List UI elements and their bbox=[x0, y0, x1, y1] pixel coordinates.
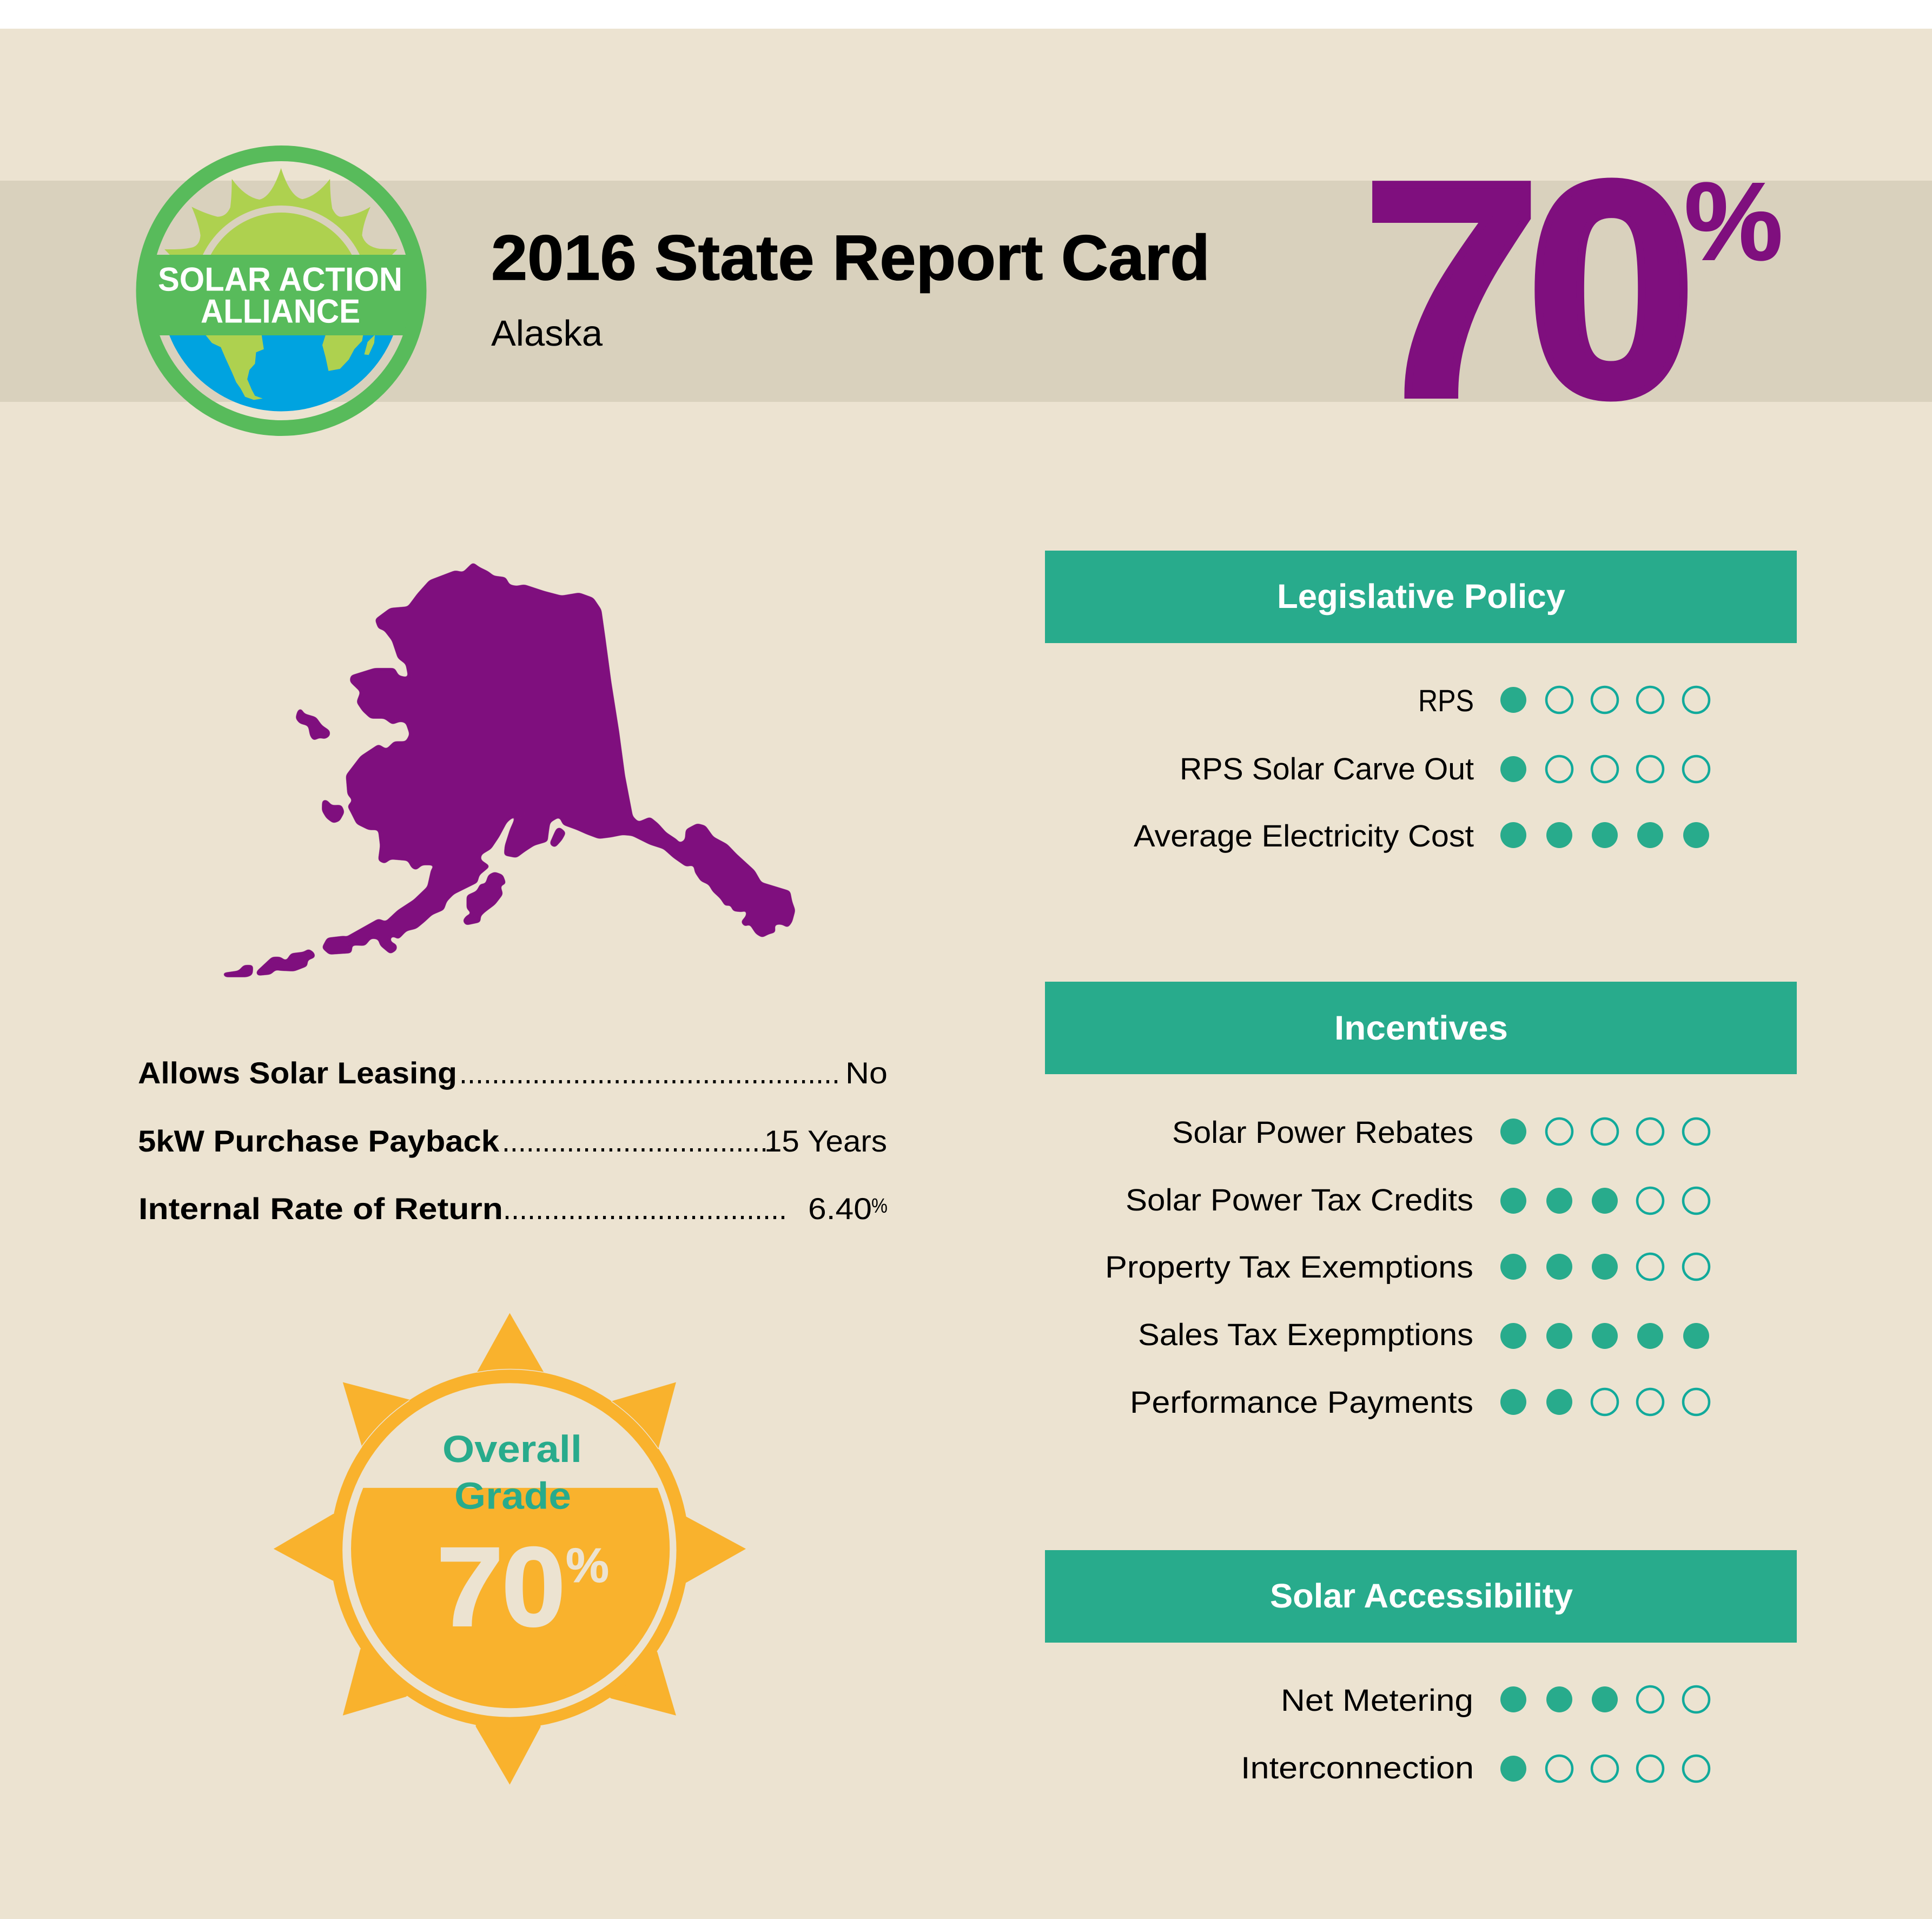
fact: payback: .................................. bbox=[502, 1124, 776, 1158]
logo globe bbox=[169, 335, 393, 411]
fact: solar leasing: ............................................... bbox=[459, 1056, 840, 1090]
fact: payback: 5kW Purchase Payback bbox=[138, 1124, 500, 1158]
fact: internal rate of return: % bbox=[871, 1195, 888, 1217]
row: performance payments bbox=[1130, 1385, 1709, 1420]
grade value: 7 bbox=[436, 1524, 504, 1650]
row: performance payments: Performance Payments bbox=[1130, 1385, 1473, 1420]
logo text: ALLIANCE bbox=[201, 293, 360, 330]
title: 2016 State Report Card bbox=[491, 222, 1210, 294]
row: solar power rebates: Solar Power Rebates bbox=[1172, 1115, 1473, 1150]
row: average electricity cost: Average Electricity Cost bbox=[1134, 819, 1474, 853]
section header: Legislative Policy bbox=[1277, 578, 1565, 616]
logo banner bbox=[143, 255, 419, 335]
row: net metering: Net Metering bbox=[1281, 1683, 1473, 1718]
panel: legislative policy bbox=[1045, 551, 1797, 853]
grade label: Grade bbox=[454, 1474, 571, 1517]
row: sales tax exemptions bbox=[1138, 1318, 1709, 1352]
grade label bbox=[442, 1428, 582, 1517]
sun rays and disc bbox=[274, 1313, 746, 1785]
grade value bbox=[436, 1524, 609, 1650]
fact: internal rate of return bbox=[138, 1192, 888, 1226]
big score: 70%: 0 bbox=[1526, 118, 1696, 460]
section header: Incentives bbox=[1334, 1009, 1508, 1047]
big score: 70%: % bbox=[1684, 160, 1783, 283]
row: solar power rebates bbox=[1172, 1115, 1709, 1150]
row: net metering bbox=[1281, 1683, 1709, 1718]
state name: Alaska bbox=[491, 313, 603, 354]
fact: payback: 15 Years bbox=[764, 1124, 887, 1158]
logo: Solar Action Alliance bbox=[143, 154, 419, 428]
row: interconnection bbox=[1241, 1751, 1709, 1785]
row: property tax exemptions: Property Tax Exemptions bbox=[1105, 1250, 1473, 1285]
row: RPS bbox=[1418, 684, 1709, 718]
header band bbox=[0, 181, 1932, 402]
row: RPS: RPS bbox=[1418, 684, 1474, 718]
big score: 70% bbox=[1362, 118, 1783, 460]
fact: solar leasing: Allows Solar Leasing bbox=[138, 1056, 457, 1090]
row: interconnection: Interconnection bbox=[1241, 1751, 1474, 1785]
fact: payback bbox=[138, 1124, 887, 1158]
grade value: 0 bbox=[502, 1524, 566, 1650]
logo text: SOLAR ACTION bbox=[158, 261, 402, 299]
row: solar power tax credits: Solar Power Tax Credits bbox=[1126, 1183, 1473, 1217]
section header bbox=[1045, 1550, 1797, 1643]
overall grade sun badge bbox=[274, 1313, 746, 1785]
panel: solar accessibility bbox=[1045, 1550, 1797, 1785]
panel: incentives bbox=[1045, 982, 1797, 1420]
fact: solar leasing bbox=[138, 1056, 888, 1090]
section header: Solar Accessibility bbox=[1270, 1577, 1573, 1615]
map: Alaska bbox=[223, 563, 795, 977]
key facts list bbox=[138, 1056, 888, 1226]
row: property tax exemptions bbox=[1105, 1250, 1709, 1285]
section header bbox=[1045, 982, 1797, 1074]
fact: internal rate of return: 6.40 bbox=[808, 1192, 872, 1226]
row: sales tax exemptions: Sales Tax Exepmptions bbox=[1138, 1318, 1473, 1352]
fact: internal rate of return: Internal Rate of Return bbox=[138, 1192, 503, 1226]
row: RPS solar carve out bbox=[1180, 752, 1709, 786]
row: average electricity cost bbox=[1134, 819, 1709, 853]
grade value: % bbox=[566, 1539, 609, 1593]
section header bbox=[1045, 551, 1797, 643]
row: solar power tax credits bbox=[1126, 1183, 1709, 1217]
fact: internal rate of return: ................................... bbox=[503, 1192, 787, 1226]
logo ring bbox=[144, 154, 419, 428]
logo sun bbox=[164, 168, 397, 255]
logo text bbox=[158, 261, 402, 330]
big score: 70%: 7 bbox=[1362, 118, 1541, 460]
fact: solar leasing: No bbox=[845, 1056, 888, 1090]
row: RPS solar carve out: RPS Solar Carve Out bbox=[1180, 752, 1474, 786]
grade label: Overall bbox=[442, 1428, 582, 1470]
